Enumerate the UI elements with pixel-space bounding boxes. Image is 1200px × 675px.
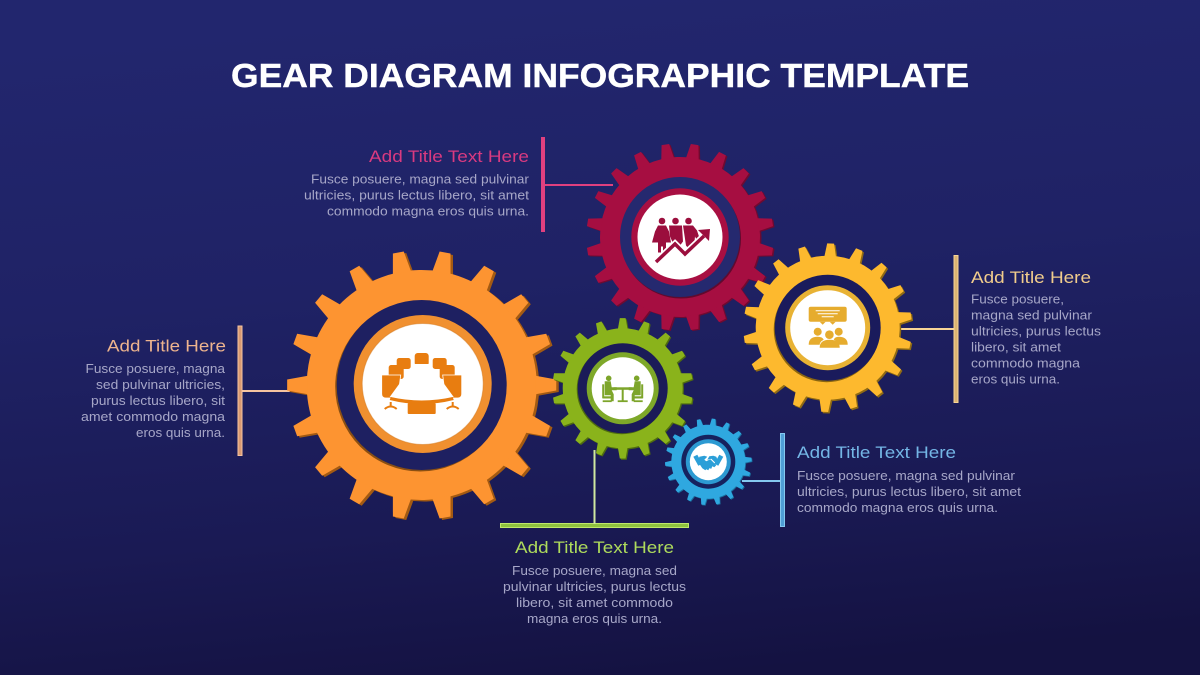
- text block: orange callout: eros quis urna.: [136, 426, 225, 440]
- text block: green callout: magna eros quis urna.: [527, 612, 662, 626]
- text block: green callout: libero, sit amet commodo: [516, 596, 673, 610]
- gear: red: [573, 130, 789, 345]
- text block: yellow callout: Fusce posuere,: [971, 292, 1064, 306]
- heading: yellow callout: Add Title Here: [971, 268, 1091, 287]
- title: GEAR DIAGRAM INFOGRAPHIC TEMPLATE: [231, 58, 969, 95]
- heading: green callout: Add Title Text Here: [515, 538, 674, 557]
- text block: green callout: [503, 564, 686, 626]
- text block: orange callout: purus lectus libero, sit: [91, 394, 226, 408]
- bracket: blue callout: [742, 434, 784, 526]
- heading: blue callout: Add Title Text Here: [797, 443, 956, 462]
- icon: speech bubble and audience: [809, 307, 848, 348]
- text block: yellow callout: commodo magna: [971, 356, 1080, 370]
- text block: blue callout: [797, 469, 1022, 515]
- icon: conference table: [382, 353, 462, 414]
- gear: orange: [235, 211, 611, 561]
- bracket: orange callout: [238, 326, 308, 456]
- text block: yellow callout: ultricies, purus lectus: [971, 324, 1101, 338]
- text block: orange callout: [81, 362, 226, 440]
- text block: yellow callout: [971, 292, 1101, 386]
- panel: blue callout: [742, 434, 1022, 526]
- icon: two people at a table: [602, 376, 643, 402]
- text block: red callout: ultricies, purus lectus libero, sit amet: [304, 188, 530, 202]
- bracket: yellow callout: [900, 256, 958, 402]
- text block: yellow callout: eros quis urna.: [971, 372, 1060, 386]
- heading: orange callout: Add Title Here: [107, 336, 226, 356]
- text block: blue callout: Fusce posuere, magna sed pulvinar: [797, 469, 1015, 483]
- text block: blue callout: commodo magna eros quis urna.: [797, 501, 998, 515]
- text block: red callout: Fusce posuere, magna sed pulvinar: [311, 172, 529, 186]
- text block: orange callout: amet commodo magna: [81, 410, 225, 424]
- text block: blue callout: ultricies, purus lectus libero, sit amet: [797, 485, 1022, 499]
- panel: red callout: [304, 137, 613, 232]
- panel: green callout: [500, 450, 688, 626]
- panel: yellow callout: [900, 256, 1101, 402]
- text block: orange callout: Fusce posuere, magna: [86, 362, 225, 376]
- text block: orange callout: sed pulvinar ultricies,: [96, 378, 225, 392]
- text block: yellow callout: magna sed pulvinar: [971, 308, 1092, 322]
- icon: team growth arrow: [652, 218, 710, 262]
- text block: red callout: commodo magna eros quis urna.: [327, 204, 529, 218]
- bracket: red callout: [541, 137, 613, 232]
- heading: red callout: Add Title Text Here: [369, 147, 529, 166]
- gear: yellow: [722, 231, 935, 426]
- bracket: green callout: [500, 450, 688, 528]
- text block: red callout: [304, 172, 530, 218]
- text block: yellow callout: libero, sit amet: [971, 340, 1062, 354]
- gear: green: [538, 311, 709, 467]
- text block: green callout: pulvinar ultricies, purus lectus: [503, 580, 686, 594]
- icon: handshake: [693, 455, 723, 470]
- panel: orange callout: [81, 326, 308, 456]
- text block: green callout: Fusce posuere, magna sed: [512, 564, 677, 578]
- gear: blue: [650, 408, 767, 516]
